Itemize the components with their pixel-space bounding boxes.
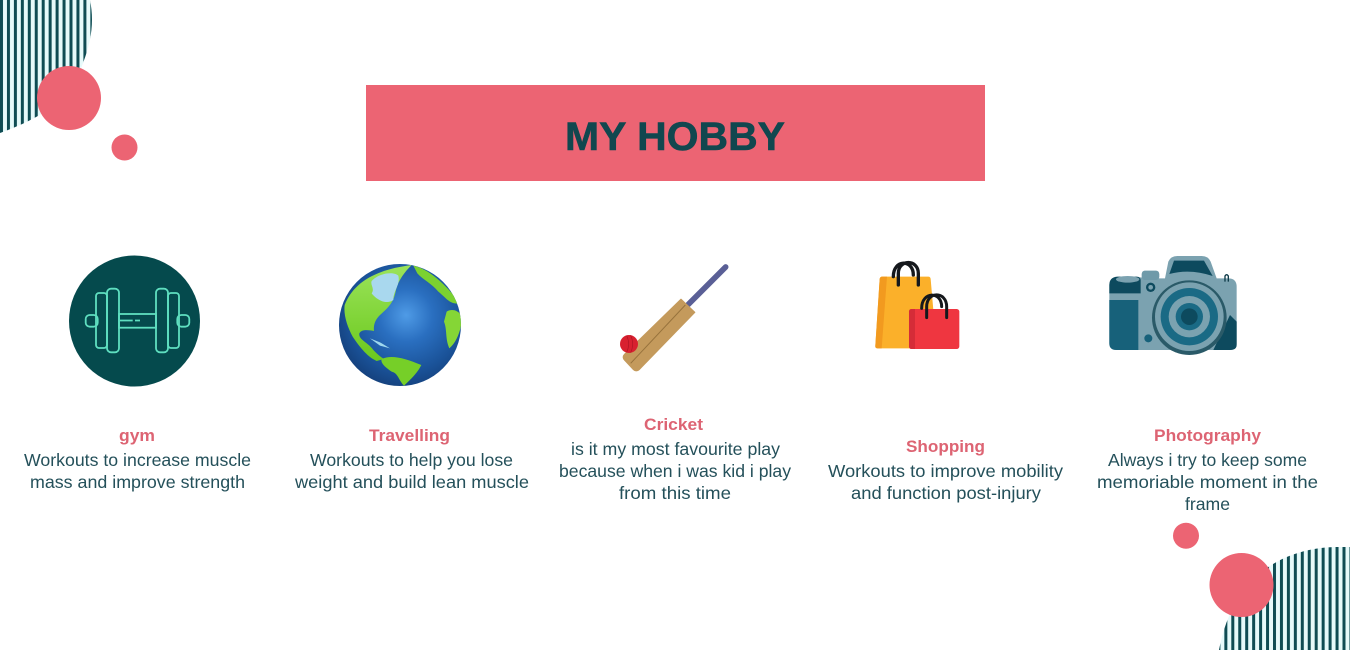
description: photography bbox=[1097, 450, 1318, 514]
icon: camera bbox=[1109, 256, 1237, 355]
icon: cricket bat and ball bbox=[620, 267, 726, 371]
panel: photography bbox=[1097, 256, 1318, 514]
description: travelling bbox=[294, 450, 529, 492]
panel: cricket bbox=[559, 267, 791, 503]
label: photography: Photography bbox=[1154, 426, 1262, 445]
description: cricket bbox=[559, 439, 791, 503]
icon: globe bbox=[339, 264, 462, 386]
title: MY HOBBY bbox=[565, 115, 785, 159]
description: gym bbox=[24, 450, 251, 492]
icon: shopping bags bbox=[875, 263, 959, 349]
description: photography: memoriable moment in the bbox=[1097, 472, 1318, 492]
description: cricket: from this time bbox=[619, 483, 731, 503]
decoration: top-left striped blob and circles bbox=[0, 0, 138, 160]
description: shopping: and function post-injury bbox=[851, 483, 1041, 503]
description: gym: Workouts to increase muscle bbox=[24, 450, 251, 470]
description: gym: mass and improve strength bbox=[30, 472, 245, 492]
panel: travelling bbox=[294, 264, 529, 492]
panel: gym bbox=[24, 256, 251, 492]
title banner bbox=[366, 85, 985, 181]
description: cricket: because when i was kid i play bbox=[559, 461, 791, 481]
label: shopping: Shopping bbox=[906, 437, 985, 456]
description: travelling: weight and build lean muscle bbox=[294, 472, 529, 492]
label: cricket: Cricket bbox=[644, 415, 703, 434]
description: cricket: is it my most favourite play bbox=[571, 439, 780, 459]
decoration: bottom-right striped blob and circles bbox=[1173, 523, 1350, 650]
label: gym: gym bbox=[119, 426, 155, 445]
description: photography: Always i try to keep some bbox=[1108, 450, 1307, 470]
label: travelling: Travelling bbox=[369, 426, 450, 445]
description: travelling: Workouts to help you lose bbox=[310, 450, 513, 470]
icon: dumbbell bbox=[69, 256, 200, 386]
description: shopping bbox=[828, 461, 1063, 503]
description: shopping: Workouts to improve mobility bbox=[828, 461, 1063, 481]
panel: shopping bbox=[828, 263, 1063, 503]
description: photography: frame bbox=[1185, 494, 1230, 514]
